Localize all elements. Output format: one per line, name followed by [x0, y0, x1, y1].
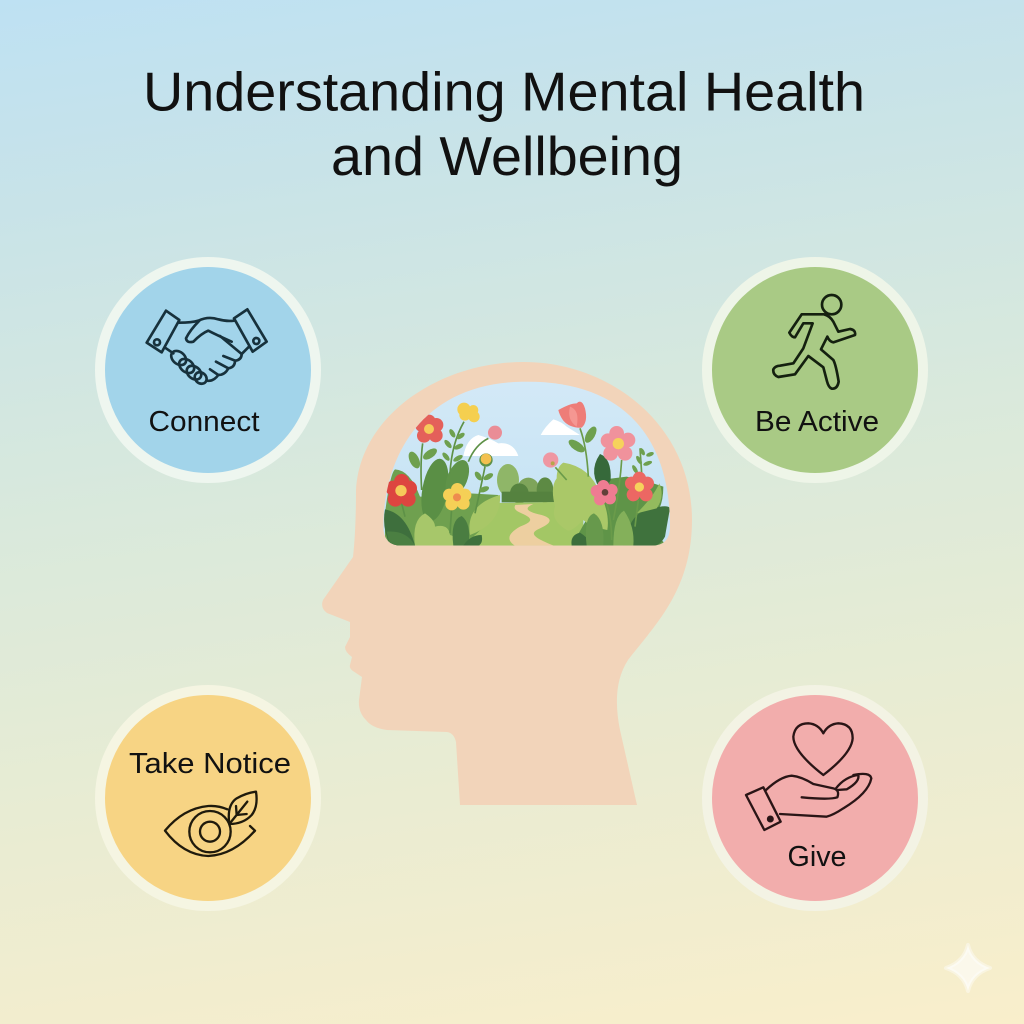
distant hills	[497, 464, 554, 503]
icon: runner	[773, 295, 855, 389]
small yellow bud	[479, 453, 493, 467]
meadow	[470, 502, 583, 547]
panel: Be Active	[707, 262, 923, 478]
dark centre flower	[591, 480, 618, 505]
tulip	[558, 402, 586, 428]
right plants	[553, 454, 670, 546]
icon: eye with leaf	[165, 792, 257, 856]
brain garden scene	[380, 380, 673, 547]
sky	[380, 380, 673, 547]
sparkle watermark	[946, 945, 990, 991]
daisy	[443, 483, 471, 510]
coral flower	[625, 472, 654, 501]
pink bud	[543, 452, 558, 468]
panel: Take Notice	[100, 690, 316, 906]
title	[143, 60, 865, 187]
title: Understanding Mental Health	[143, 60, 865, 122]
icon: handshake	[147, 309, 267, 386]
winding path	[509, 504, 557, 547]
pink flower	[601, 426, 635, 461]
left plants	[384, 457, 500, 546]
pink bud	[488, 426, 502, 440]
label: Connect	[148, 406, 260, 438]
right flowers	[543, 402, 654, 540]
clouds	[463, 419, 580, 456]
label: Take Notice	[129, 748, 291, 780]
yellow flower	[457, 403, 480, 422]
title: and Wellbeing	[331, 125, 683, 187]
deep red flower	[386, 474, 417, 507]
label: Be Active	[755, 406, 879, 438]
label: Give	[788, 841, 846, 873]
red flower	[415, 415, 443, 443]
panel: Give	[707, 690, 923, 906]
panel: Connect	[100, 262, 316, 478]
left flowers	[386, 403, 502, 533]
head silhouette	[322, 362, 692, 805]
icon: hand holding heart	[746, 723, 871, 830]
